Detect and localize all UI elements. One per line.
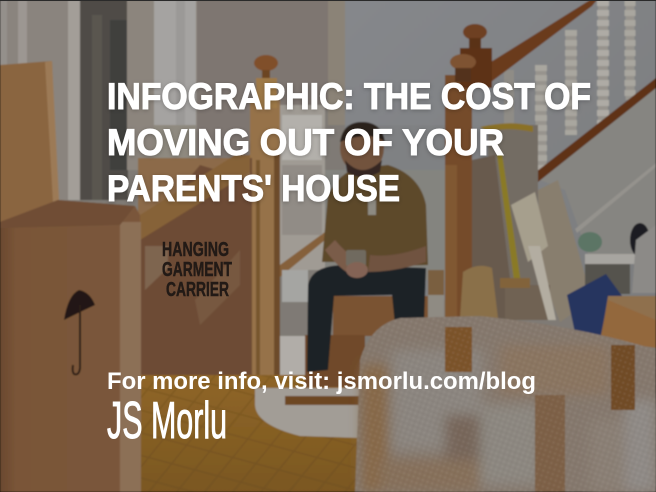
white stair risers	[276, 270, 308, 386]
carton lettering: hanging garment carrier: GARMENT	[162, 259, 232, 281]
logo wordmark: JS Morlu	[107, 392, 227, 450]
upper handrail	[486, 0, 597, 85]
curtain panel	[127, 0, 198, 170]
top edge line	[0, 0, 656, 1]
left wall and curtain	[0, 0, 80, 200]
title: PARENTS' HOUSE	[107, 168, 400, 209]
door trim	[328, 0, 345, 125]
wall centre	[197, 0, 328, 110]
blue folder	[567, 274, 625, 337]
cardboard box at right	[600, 296, 656, 348]
title: MOVING OUT OF YOUR	[107, 122, 504, 163]
twisted balusters	[509, 0, 630, 170]
right newel post	[445, 24, 492, 320]
carton lettering: hanging garment carrier: HANGING	[162, 239, 229, 261]
shelf and items at right	[578, 223, 656, 294]
left newel post	[250, 55, 280, 375]
man: arms and mug	[325, 240, 426, 278]
man: shirt	[322, 165, 428, 270]
rolled rugs	[472, 123, 592, 322]
bubble wrap parcel	[355, 316, 656, 492]
lower stair wall	[540, 85, 656, 260]
woven basket	[460, 266, 498, 318]
doorway	[80, 0, 128, 200]
man: head	[340, 122, 385, 177]
left stair balusters	[280, 105, 325, 277]
carton lettering: hanging garment carrier	[162, 239, 232, 301]
wall right	[345, 0, 656, 300]
large carton with lettering	[138, 155, 252, 375]
title	[107, 76, 591, 209]
title: INFOGRAPHIC: THE COST OF	[107, 76, 591, 117]
wall behind man	[325, 170, 445, 280]
carton lettering: hanging garment carrier: CARRIER	[166, 279, 229, 301]
floor	[140, 375, 370, 492]
man: trousers	[307, 265, 426, 372]
stair base	[255, 388, 360, 438]
footer link text: For more info, visit: jsmorlu.com/blog	[107, 368, 536, 395]
wooden steps	[305, 270, 444, 387]
white fringe rug	[528, 246, 556, 320]
lower handrail	[536, 78, 656, 182]
umbrella symbol on carton	[64, 290, 95, 374]
large foreground carton	[0, 200, 141, 492]
top-left carton	[0, 61, 60, 222]
